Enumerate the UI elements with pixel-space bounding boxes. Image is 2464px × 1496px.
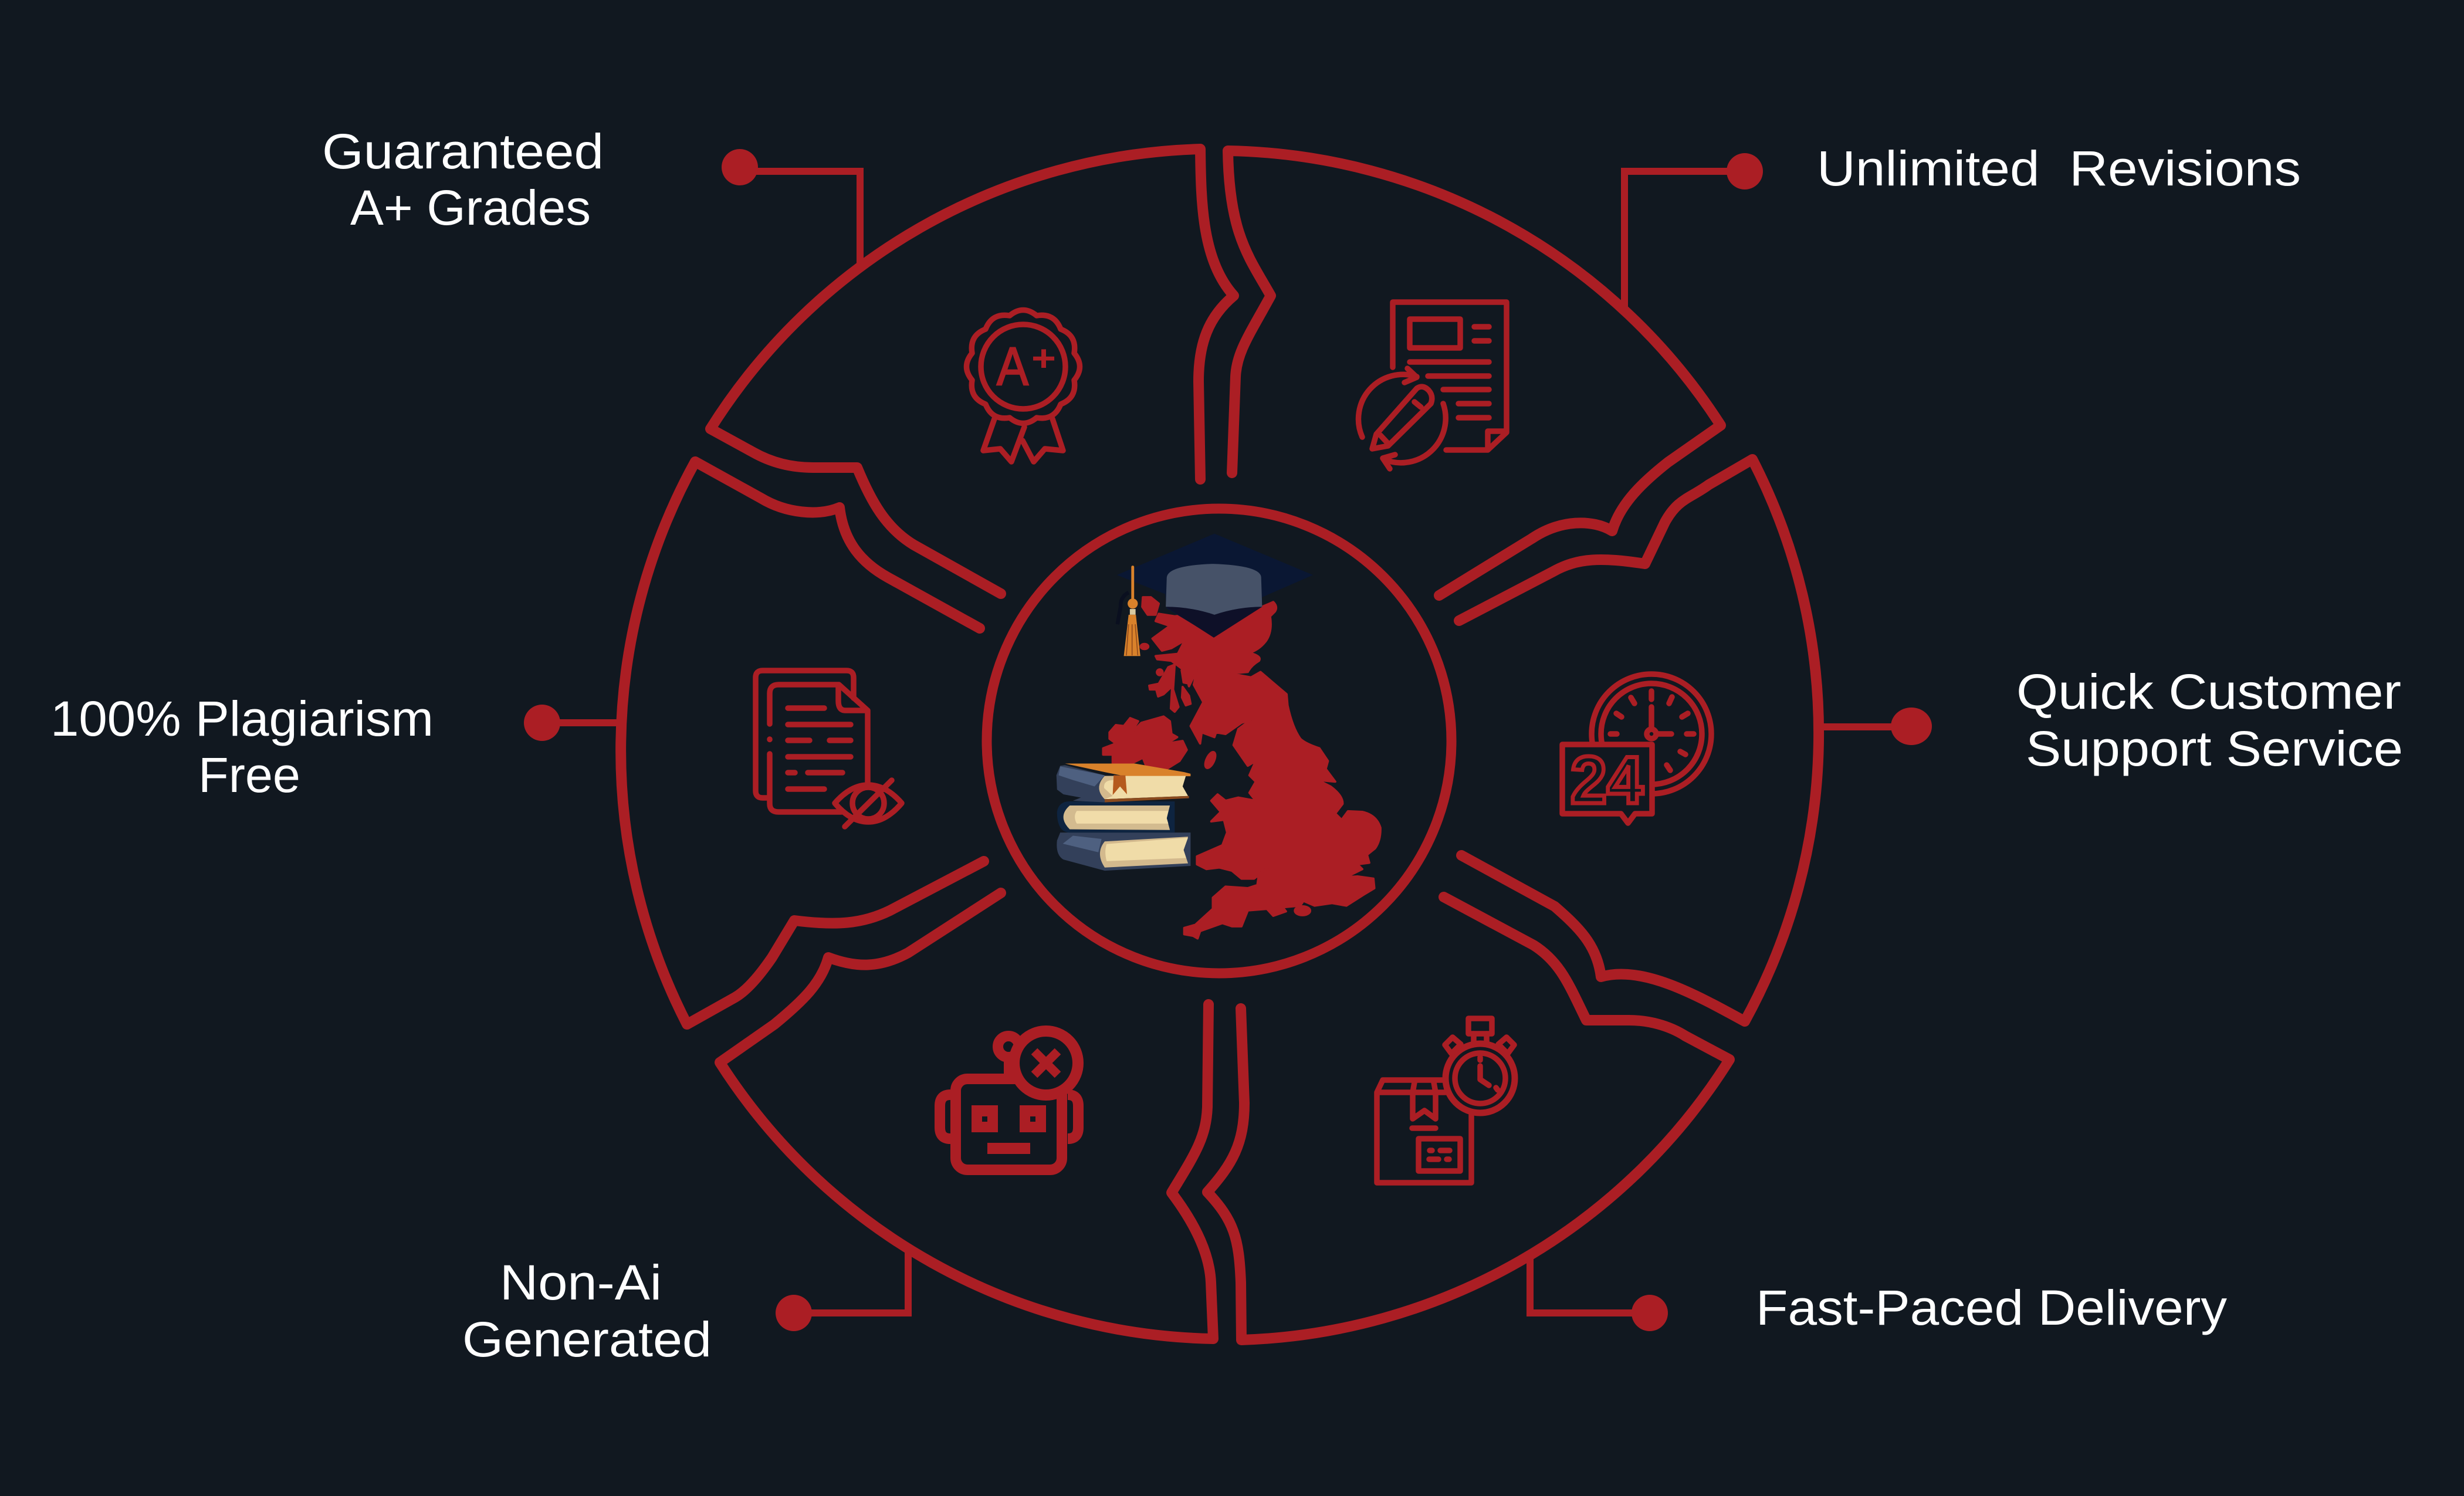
panel: Guaranteed A+ Grades [322, 124, 1234, 594]
label: Non-Ai Generated: Non-Ai [500, 1255, 662, 1310]
UK map [1103, 597, 1380, 939]
connector: Quick Customer Support Service [1819, 708, 1932, 745]
label: Quick Customer Support Service: Quick Customer [2016, 664, 2401, 719]
label: 100% Plagiarism Free: Free [198, 747, 300, 803]
center emblem [987, 509, 1451, 973]
segment outline: top right [1228, 151, 1721, 595]
panel: Quick Customer Support Service [1459, 459, 2403, 1021]
segment outline: bottom right [1207, 897, 1729, 1340]
connector: 100% Plagiarism Free [524, 705, 622, 741]
connector: Fast-Paced Delivery [1530, 1258, 1668, 1331]
icon: 24 hour clock: 24 [1571, 743, 1643, 818]
label: Non-Ai Generated [462, 1255, 712, 1367]
segment outline: top left [710, 149, 1234, 594]
panel: Non-Ai Generated [462, 893, 1213, 1367]
connector: Unlimited Revisions [1624, 153, 1763, 313]
label: 100% Plagiarism Free: 100% Plagiarism [50, 691, 434, 746]
illustration: UK map with graduation cap and books [1057, 534, 1380, 939]
label: Guaranteed A+ Grades [322, 124, 604, 235]
icon: parcel with stopwatch [1377, 1018, 1515, 1183]
segment outline: left [621, 462, 984, 1024]
icon: A+ rosette [967, 310, 1079, 462]
center circle [987, 509, 1451, 973]
label: Quick Customer Support Service: Support Service [2026, 721, 2403, 776]
connector: Guaranteed A+ Grades [722, 149, 860, 265]
label: Unlimited Revisions: Unlimited Revisions [1817, 141, 2301, 196]
label: 100% Plagiarism Free [50, 691, 434, 803]
icon: A+ rosette: + [1031, 339, 1056, 379]
segment outline: right [1459, 459, 1819, 1021]
icon: document with crossed eye [756, 671, 902, 827]
stack of books [1057, 763, 1190, 871]
icon: document with revision pencil [1359, 302, 1507, 469]
graduation cap [1117, 534, 1313, 656]
label: Guaranteed A+ Grades: A+ Grades [350, 180, 591, 235]
label: Quick Customer Support Service [2016, 664, 2403, 776]
label: Guaranteed A+ Grades: Guaranteed [322, 124, 604, 179]
label: Non-Ai Generated: Generated [462, 1312, 712, 1367]
label: Fast-Paced Delivery: Fast-Paced Delivery [1756, 1280, 2227, 1335]
segment outline: bottom left [720, 893, 1213, 1339]
panel: 100% Plagiarism Free [50, 462, 984, 1024]
connector: Non-Ai Generated [776, 1252, 908, 1331]
panel: Unlimited Revisions [1228, 141, 2301, 595]
icon: robot with cross badge [940, 1031, 1078, 1170]
icon: 24 hour clock [1562, 674, 1711, 823]
icon: A+ rosette: A [997, 337, 1029, 397]
panel: Fast-Paced Delivery [1207, 897, 2227, 1340]
